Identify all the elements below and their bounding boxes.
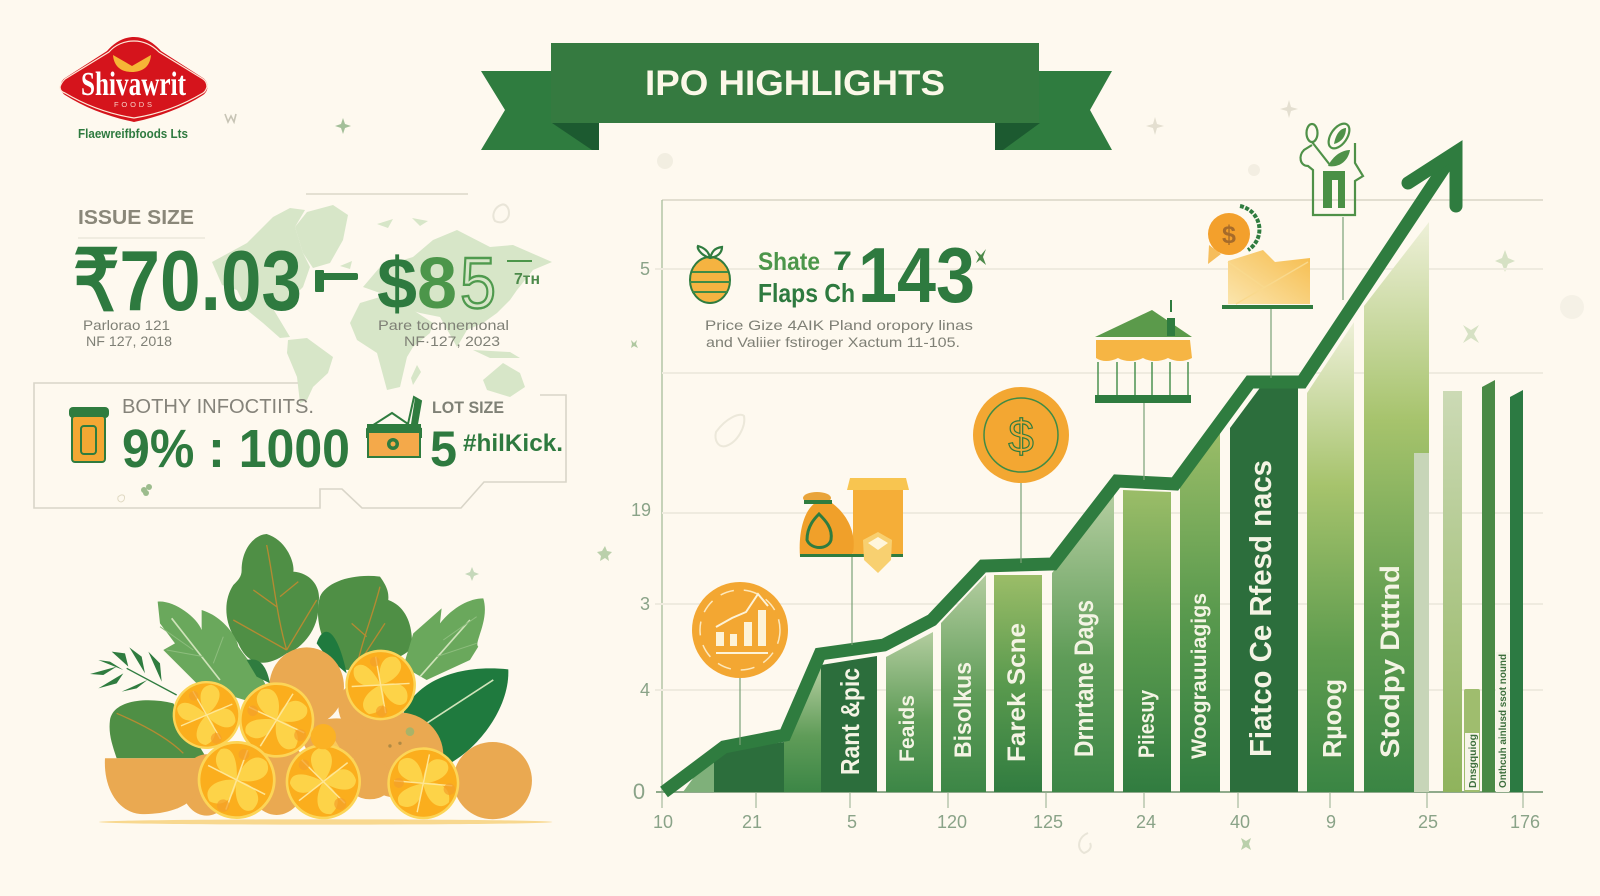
lot size label: LOT SIZE <box>432 398 504 417</box>
bar labels: Fiatco Ce Rfesd nacs <box>1243 460 1278 757</box>
stems <box>740 217 1343 745</box>
chart <box>631 120 1543 832</box>
issue value dollar: 7ᴛʜ <box>514 271 540 288</box>
bar labels: Rant &pic <box>835 668 865 775</box>
company name: Flaewreifbfoods Lts <box>78 127 188 141</box>
y axis labels: 0 <box>633 779 645 804</box>
fruit illustration <box>90 534 552 833</box>
icon: cup <box>69 407 109 462</box>
x axis labels: 120 <box>937 812 967 832</box>
title banner <box>481 43 1112 150</box>
herb sprig <box>90 647 177 695</box>
left sublabel: Parlorao 121 <box>83 317 170 333</box>
issue value dollar <box>377 244 540 324</box>
small leaf marks <box>118 484 152 502</box>
x axis labels <box>653 812 1540 832</box>
left sublabel: NF 127, 2018 <box>86 333 172 349</box>
bars <box>683 222 1523 792</box>
left sublabel <box>83 317 172 349</box>
bar labels: Farek Scne <box>1003 623 1031 762</box>
price description <box>705 317 973 350</box>
icon: food bag and cup <box>800 478 909 573</box>
arrow between values <box>315 270 358 292</box>
logo crescent <box>113 55 151 72</box>
icon: apple <box>690 246 730 303</box>
share label line one: Shate <box>758 248 820 276</box>
value 9% : 1000: 9% : 1000 <box>122 419 350 479</box>
issue value dollar: $ <box>377 244 417 324</box>
citrus slices <box>163 635 473 833</box>
share value: 143 <box>858 231 975 319</box>
bar labels <box>835 460 1509 788</box>
y axis labels: 4 <box>640 680 650 700</box>
icon: coin and envelope <box>1208 206 1313 309</box>
issue size block <box>73 194 540 349</box>
chart axes <box>655 200 1543 808</box>
bar labels: Feaids <box>896 695 919 762</box>
share label line one: 7 <box>833 246 852 276</box>
bar labels: Stodpy Dtttnd <box>1375 565 1405 758</box>
bar labels: Drnrtane Dags <box>1069 600 1099 757</box>
x axis labels: 40 <box>1230 812 1250 832</box>
bothy label: BOTHY INFOCTIITS. <box>122 396 314 418</box>
fruits <box>105 647 532 819</box>
bar labels: Onthcuh ainlusd ssot nound <box>1498 654 1509 788</box>
right sublabel <box>378 317 509 349</box>
x axis labels: 24 <box>1136 812 1156 832</box>
price description: Price Gize 4AIK Pland oropory linas <box>705 317 973 333</box>
x axis labels: 176 <box>1510 812 1540 832</box>
price description: and Valiier fstiroger Xactum 11-105. <box>706 334 960 350</box>
logo foods label: FOODS <box>114 100 154 109</box>
background sparkles <box>225 100 1584 853</box>
logo <box>60 37 208 141</box>
share callout <box>690 231 986 350</box>
share label line two: Flaps Ch <box>758 278 855 308</box>
icon: plant in pot <box>1301 120 1363 215</box>
bar labels: Piiesuy <box>1134 689 1159 758</box>
icon: market stall <box>1095 300 1192 403</box>
issue value dollar: 8 <box>417 244 457 324</box>
y axis labels: 5 <box>640 259 650 279</box>
growth arrow <box>664 152 1456 792</box>
lot size value: 5 <box>430 421 457 477</box>
leaves <box>110 534 508 763</box>
icon: dollar coin <box>973 387 1069 483</box>
icon: shop <box>367 397 421 457</box>
bar labels: Bisolkus <box>950 662 977 758</box>
issue value dollar: 5 <box>460 244 496 324</box>
title: IPO HIGHLIGHTS <box>645 64 945 103</box>
ground shadow <box>99 819 552 825</box>
x axis labels: 9 <box>1326 812 1336 832</box>
x axis labels: 5 <box>847 812 857 832</box>
y axis labels <box>631 259 651 804</box>
issue size heading: ISSUE SIZE <box>78 207 194 229</box>
right sublabel: NF·127, 2023 <box>404 333 500 349</box>
icon: coin and envelope: $ <box>1222 221 1236 249</box>
x axis labels: 25 <box>1418 812 1438 832</box>
x axis labels: 21 <box>742 812 762 832</box>
right sublabel: Pare tocnnemonal <box>378 317 509 333</box>
bar labels: Rµoog <box>1317 679 1347 758</box>
issue value rupee: ₹70.03 <box>73 234 302 329</box>
stats panel <box>34 383 566 508</box>
y axis labels: 19 <box>631 500 651 520</box>
x axis labels: 125 <box>1033 812 1063 832</box>
x axis labels: 10 <box>653 812 673 832</box>
bar labels: Dnsgquiog <box>1468 734 1479 788</box>
lot size suffix: #hilKick. <box>463 430 563 457</box>
y axis labels: 3 <box>640 594 650 614</box>
icon: dollar coin: $ <box>1008 410 1034 462</box>
logo brand name: Shivawrit <box>81 66 186 103</box>
world map <box>212 205 552 403</box>
share label line one <box>758 246 852 276</box>
icon: chart coin <box>692 582 788 678</box>
bar labels: Woograuuiagigs <box>1188 593 1211 759</box>
